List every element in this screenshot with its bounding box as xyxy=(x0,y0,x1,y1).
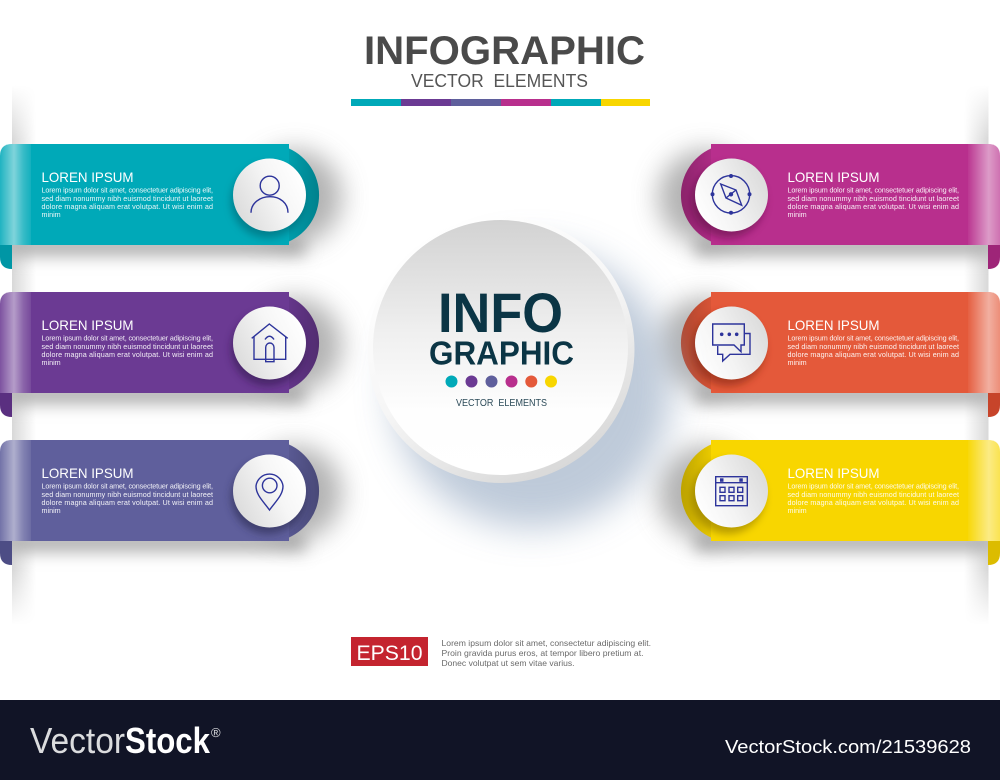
panel: magenta ribbon xyxy=(658,144,1000,269)
ribbon text: Lorem ipsum dolor sit amet, consectetuer adipiscing elit, xyxy=(788,334,959,342)
icon: calendar xyxy=(716,477,747,506)
panel: teal ribbon xyxy=(0,144,342,269)
ribbon text: LOREN IPSUM xyxy=(42,465,134,481)
icon: map pin xyxy=(256,474,283,510)
ribbon text: Lorem ipsum dolor sit amet, consectetuer adipiscing elit, xyxy=(42,186,213,194)
footnote text: Lorem ipsum dolor sit amet, consectetur adipiscing elit. xyxy=(442,638,651,648)
footer logo: Vector xyxy=(30,720,125,761)
ribbon text xyxy=(42,465,213,515)
central heading: GRAPHIC xyxy=(429,334,574,372)
ribbon text xyxy=(42,169,213,219)
footer logo: ® xyxy=(211,725,221,740)
ribbon text: dolore magna aliquam erat volutpat. Ut wisi enim ad xyxy=(788,350,959,359)
icon: person xyxy=(251,176,288,213)
ribbon text: dolore magna aliquam erat volutpat. Ut wisi enim ad xyxy=(788,202,959,211)
ribbon text: sed diam nonummy nibh euismod tincidunt ut laoreet xyxy=(788,194,959,203)
footnote text xyxy=(442,638,651,668)
icon: house xyxy=(252,324,288,362)
title: VECTOR ELEMENTS xyxy=(411,71,588,91)
icon: speech bubbles xyxy=(713,324,750,361)
ribbon text: minim xyxy=(42,210,61,219)
panel: slate ribbon xyxy=(0,440,342,565)
EPS10 badge: EPS10 xyxy=(356,642,422,665)
ribbon text: dolore magna aliquam erat volutpat. Ut wisi enim ad xyxy=(42,498,213,507)
ribbon text: LOREN IPSUM xyxy=(42,317,134,333)
icon: compass xyxy=(711,175,751,214)
EPS10 badge xyxy=(351,637,428,666)
ribbon text: Lorem ipsum dolor sit amet, consectetuer adipiscing elit, xyxy=(42,482,213,490)
colour dots xyxy=(446,376,557,388)
ribbon text: sed diam nonummy nibh euismod tincidunt ut laoreet xyxy=(42,342,213,351)
central disc xyxy=(368,216,672,528)
footer logo: Stock xyxy=(125,720,211,761)
ribbon text: Lorem ipsum dolor sit amet, consectetuer adipiscing elit, xyxy=(788,186,959,194)
footer image id: VectorStock.com/21539628 xyxy=(725,736,971,757)
ribbon text xyxy=(788,317,959,367)
ribbon text: LOREN IPSUM xyxy=(42,169,134,185)
ribbon text: minim xyxy=(788,506,807,515)
ribbon text: minim xyxy=(788,210,807,219)
ribbon text: minim xyxy=(788,358,807,367)
ribbon text xyxy=(788,465,959,515)
ribbon text: dolore magna aliquam erat volutpat. Ut wisi enim ad xyxy=(788,498,959,507)
ribbon text xyxy=(42,317,213,367)
ribbon text: sed diam nonummy nibh euismod tincidunt ut laoreet xyxy=(42,194,213,203)
title colour bar xyxy=(351,99,650,106)
title: INFOGRAPHIC xyxy=(364,29,645,73)
central subtitle: VECTOR ELEMENTS xyxy=(456,398,547,409)
ribbon text: minim xyxy=(42,506,61,515)
ribbon text: sed diam nonummy nibh euismod tincidunt ut laoreet xyxy=(788,490,959,499)
ribbon text: LOREN IPSUM xyxy=(788,317,880,333)
central heading: INFO xyxy=(438,281,563,344)
page edge shadows xyxy=(12,85,988,625)
footnote text: Donec volutpat ut sem vitae varius. xyxy=(442,658,574,668)
panel: yellow ribbon xyxy=(658,440,1000,565)
footer band xyxy=(0,700,1000,780)
footnote text: Proin gravida purus eros, at tempor libero pretium at. xyxy=(442,648,644,658)
ribbon text: Lorem ipsum dolor sit amet, consectetuer adipiscing elit, xyxy=(788,482,959,490)
ribbon text: LOREN IPSUM xyxy=(788,465,880,481)
ribbon text: sed diam nonummy nibh euismod tincidunt ut laoreet xyxy=(788,342,959,351)
ribbon text: Lorem ipsum dolor sit amet, consectetuer adipiscing elit, xyxy=(42,334,213,342)
panel: purple ribbon xyxy=(0,292,342,417)
central heading xyxy=(429,281,574,372)
ribbon text: dolore magna aliquam erat volutpat. Ut wisi enim ad xyxy=(42,350,213,359)
ribbon text xyxy=(788,169,959,219)
footer logo xyxy=(30,720,221,761)
panel: orange ribbon xyxy=(658,292,1000,417)
ribbon text: dolore magna aliquam erat volutpat. Ut wisi enim ad xyxy=(42,202,213,211)
ribbon text: sed diam nonummy nibh euismod tincidunt ut laoreet xyxy=(42,490,213,499)
ribbon text: LOREN IPSUM xyxy=(788,169,880,185)
ribbon text: minim xyxy=(42,358,61,367)
